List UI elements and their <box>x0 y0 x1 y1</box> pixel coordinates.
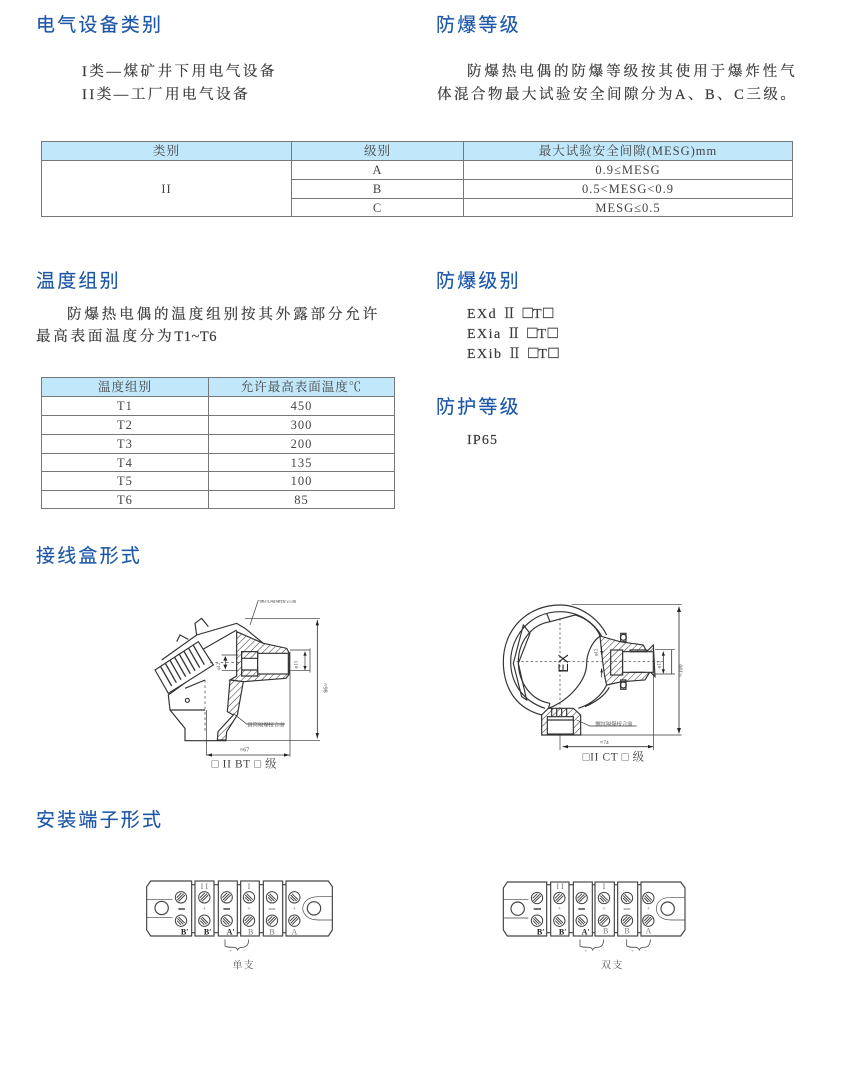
diagram: double terminal block: B <box>603 926 608 935</box>
heading: protection grade: 防护等级 <box>436 397 521 418</box>
diagram: single terminal block: A <box>291 927 297 936</box>
table: temperature groups: 200 <box>291 437 312 451</box>
diagram: junction box IIC front section: ≈74 <box>600 740 609 746</box>
diagram: double terminal block: + <box>646 906 650 913</box>
diagram: double terminal block: + <box>602 906 606 913</box>
diagram: single terminal block: I I <box>201 882 208 891</box>
diagram: double terminal block: + <box>557 906 561 913</box>
table: temperature groups: 温度组别 <box>98 380 152 394</box>
table: MESG grades: 级别 <box>364 144 391 158</box>
diagram: double terminal block: B′ <box>537 927 544 936</box>
diagram: junction box IIB side section <box>154 600 328 770</box>
table: temperature groups: 允许最高表面温度℃ <box>241 380 362 394</box>
text: equipment category list <box>82 63 277 103</box>
label: EX mark: EX <box>555 653 571 673</box>
table: temperature groups: 100 <box>291 474 312 488</box>
diagram: single terminal block: A′ <box>227 927 235 936</box>
text: explosion-proof markings: EXd Ⅱ □T□ <box>467 303 553 322</box>
diagram: single terminal block: + <box>202 906 206 913</box>
text: explosion-proof grade description: 体混合物最大试验安全间隙分为A、B、C三级。 <box>437 87 797 103</box>
table: MESG grades: MESG≤0.5 <box>595 200 661 214</box>
diagram: single terminal block: B <box>269 927 275 936</box>
diagram: double terminal block: − <box>597 949 601 955</box>
table: MESG grades: 0.9≤MESG <box>595 163 661 177</box>
diagram: double terminal block: 双支 <box>601 958 624 971</box>
heading: temperature group: 温度组别 <box>36 271 121 292</box>
diagram: double terminal block <box>502 881 686 971</box>
diagram: junction box IIB side section: ≈67 <box>240 748 249 754</box>
heading: junction box form: 接线盒形式 <box>36 546 142 567</box>
diagram: double terminal block: A′ <box>582 927 590 936</box>
text: explosion-proof grade description <box>437 63 798 103</box>
table: MESG grades: B <box>373 182 382 196</box>
table: temperature groups: 85 <box>294 492 309 506</box>
text: temperature group description <box>36 306 380 345</box>
diagram: junction box IIB side section: ≈98 <box>321 683 327 693</box>
diagram: junction box IIC front section: φ13 <box>658 660 663 668</box>
text: protection rating: IP65 <box>467 433 498 448</box>
table: MESG grades: A <box>372 163 383 177</box>
heading: explosion-proof marking: 防爆级别 <box>436 271 521 292</box>
diagram: double terminal block: + <box>584 949 587 955</box>
table: temperature groups: 450 <box>291 399 312 413</box>
heading: terminal form: 安装端子形式 <box>36 810 163 831</box>
text: equipment category list: II类—工厂用电气设备 <box>82 87 250 103</box>
diagram: junction box IIC front section: □II CT □ 级 <box>583 751 645 764</box>
text: equipment category list: I类—煤矿井下用电气设备 <box>82 64 277 80</box>
diagram: single terminal block <box>146 880 333 971</box>
text: explosion-proof markings: EXia Ⅱ □T□ <box>467 323 558 342</box>
text: explosion-proof grade description: 防爆热电偶的防爆等级按其使用于爆炸性气 <box>467 64 798 80</box>
diagram: single terminal block: + <box>229 949 232 955</box>
diagram: junction box IIB side section: 圆筒隔爆接合面 <box>247 721 285 729</box>
table: temperature groups: 135 <box>291 456 312 470</box>
diagram: junction box IIC front section <box>502 604 684 764</box>
table: MESG grades: C <box>373 200 382 214</box>
diagram: double terminal block: A <box>645 926 651 935</box>
table: temperature groups: T5 <box>117 474 133 488</box>
diagram: single terminal block: + <box>292 906 296 913</box>
diagram: double terminal block: + <box>631 949 634 955</box>
diagram: single terminal block: I <box>248 882 251 891</box>
diagram: double terminal block: B′ <box>559 927 566 936</box>
diagram: double terminal block: B <box>624 926 630 935</box>
text: explosion-proof markings <box>467 303 559 362</box>
heading: explosion-proof grade: 防爆等级 <box>436 15 521 36</box>
diagram: junction box IIB side section: φ12 <box>217 662 222 670</box>
diagram: single terminal block: B′ <box>204 927 211 936</box>
diagram: single terminal block: B <box>248 927 253 936</box>
text: temperature group description: 防爆热电偶的温度组别按其外露部分允许 <box>67 307 380 323</box>
diagram: double terminal block: I I <box>556 882 564 891</box>
table: temperature groups: T6 <box>117 492 133 506</box>
table: temperature groups: T1 <box>117 399 133 413</box>
text: temperature group description: 最高表面温度分为T1~T6 <box>36 329 217 345</box>
diagram: single terminal block: B′ <box>181 927 188 936</box>
diagram: junction box IIC front section: φ12 <box>595 648 600 656</box>
table: temperature groups: T3 <box>117 437 133 451</box>
diagram: junction box IIC front section: 螺纹隔爆接合面 <box>595 720 633 728</box>
diagram: junction box IIB side section: φ13 <box>295 660 300 668</box>
text: explosion-proof markings: EXib Ⅱ □T□ <box>467 343 559 362</box>
diagram: single terminal block: − <box>242 949 246 955</box>
table: MESG grades: 最大试验安全间隙(MESG)mm <box>539 144 717 158</box>
table: temperature groups <box>41 377 395 509</box>
table: MESG grades: 0.5<MESG<0.9 <box>582 182 674 196</box>
table: MESG grades <box>41 141 793 217</box>
diagram: single terminal block: 单支 <box>232 958 255 971</box>
diagram: junction box IIC front section: ≈100 <box>678 664 684 677</box>
table: temperature groups: T2 <box>117 418 133 432</box>
heading: electrical equipment category: 电气设备类别 <box>36 15 163 36</box>
diagram: double terminal block: I <box>603 882 606 891</box>
diagram: double terminal block: − <box>644 949 647 955</box>
table: MESG grades: 类别 <box>153 144 180 158</box>
table: MESG grades: II <box>161 182 172 196</box>
table: temperature groups: T4 <box>117 456 133 470</box>
table: temperature groups: 300 <box>291 418 312 432</box>
diagram: single terminal block: + <box>247 906 251 913</box>
